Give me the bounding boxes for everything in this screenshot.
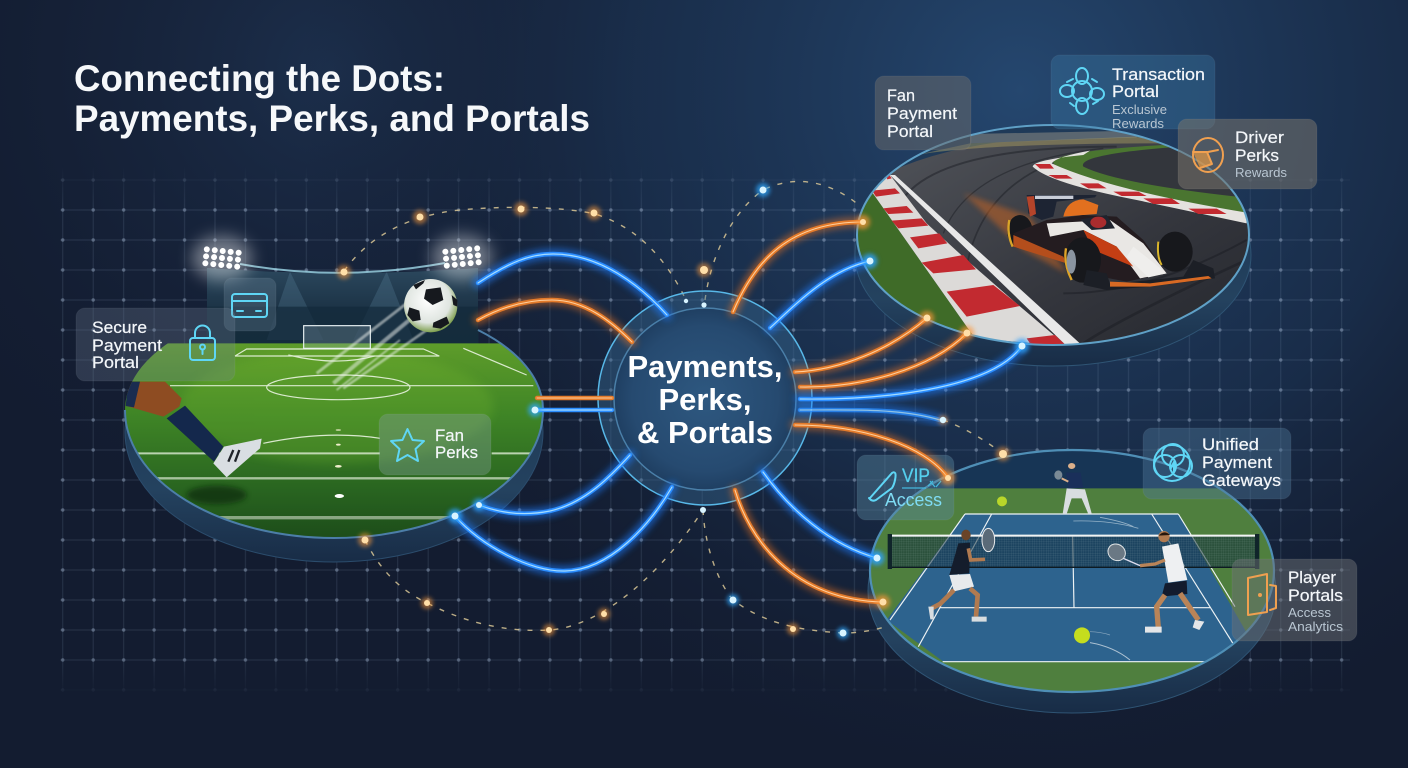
soccer field and stadium [93,263,560,567]
panel: tennis scene [850,420,1357,713]
card: fan perks [379,414,491,475]
ball streaks [317,303,427,390]
card: player portals: Access [1288,605,1332,620]
grass verge [858,194,972,334]
connector: blue, racing lower [800,346,1022,399]
title [74,58,590,139]
icon: transaction network [1060,68,1104,114]
connector: orange, soccer to hub [478,300,632,342]
tennis balls [997,496,1138,660]
card: player portals: Portals [1288,586,1343,605]
card: player portals: Player [1288,568,1336,587]
card: transaction portal: Transaction [1112,65,1205,84]
car [1007,195,1215,290]
disk base [868,469,1276,713]
speed trail [963,193,1067,273]
connector: blue, lower soccer [479,455,630,513]
connector: orange, racing lower [800,333,967,387]
network nodes [337,183,1029,639]
card: secure payment portal [76,308,235,381]
connector: orange, soccer horizontal [537,393,612,403]
tennis court [871,451,1273,691]
central hub: Perks, [658,382,752,417]
card: transaction portal: Portal [1112,82,1159,101]
card: driver perks: Driver [1235,128,1284,147]
connector: blue, tennis [763,472,877,558]
central hub: & Portals [637,415,773,450]
central hub [598,291,812,505]
race track [858,126,1248,344]
card: fan payment portal: Fan [887,86,915,105]
icon: helmet [1193,138,1223,172]
icon: VIP pass [869,472,896,501]
card: driver perks: Rewards [1235,165,1288,180]
card: transaction portal: Rewards [1112,116,1165,131]
connector: blue, soccer horizontal [535,404,612,416]
connector: orange, racing middle [795,318,927,372]
goal [304,326,370,348]
near right player [1105,531,1204,633]
card: secure payment portal: Portal [92,353,139,372]
card: player portals [1232,559,1357,641]
panel: racing scene [850,55,1317,366]
icon: door [1248,574,1276,615]
leg [126,382,262,504]
card: payment icon tile [224,278,276,331]
card: secure payment portal: Secure [92,318,147,337]
title: Payments, Perks, and Portals [74,98,590,139]
disk base [855,144,1251,366]
disk base [125,322,543,562]
card: secure payment portal: Payment [92,336,162,355]
card: driver perks [1178,119,1317,189]
disk rim [870,450,1274,692]
net [888,534,1259,569]
card: unified payment gateways: Gateways [1202,471,1281,490]
soccer ball [404,279,457,332]
card: VIP access: VIP [902,466,930,487]
card: player portals: Analytics [1288,619,1344,634]
outer kerb [872,175,1067,346]
central hub: Payments, [627,349,783,384]
asphalt skid marks [900,147,1247,343]
card: VIP access: Access [885,490,942,510]
card: VIP access [857,455,954,520]
card: driver perks: Perks [1235,146,1279,165]
near left player [928,528,995,622]
far player [1054,463,1092,514]
connector: blue, racing top [770,261,870,328]
card: fan payment portal: Portal [887,122,933,141]
card: fan payment portal: Payment [887,104,957,123]
disk rim [857,125,1249,345]
card: fan perks: Fan [435,426,464,445]
card: unified payment gateways: Payment [1202,453,1272,472]
card: fan perks: Perks [435,443,478,462]
infield [1053,145,1244,212]
title: Connecting the Dots: [74,58,445,99]
connector: orange, tennis [735,490,883,602]
dashed connectors [344,181,1003,633]
card: transaction portal: Exclusive [1112,102,1167,117]
icon: gateways [1154,444,1192,481]
icon: lock [190,326,215,360]
connector: blue, soccer to hub top [478,254,667,315]
stadium light arc [240,263,445,273]
connector: blue, right fading [800,410,940,420]
stadium lights [192,235,492,280]
disk rim [125,330,543,538]
background grid [60,165,1350,695]
card: unified payment gateways [1143,428,1291,499]
connector: blue, bottom soccer [455,487,672,571]
connector: orange, tennis top [795,425,948,478]
card: fan payment portal [875,76,971,150]
panel: soccer scene [76,235,560,567]
connector: orange, racing top [733,222,863,312]
card: transaction portal [1051,55,1215,131]
card: unified payment gateways: Unified [1202,435,1259,454]
icon: star [391,429,424,461]
